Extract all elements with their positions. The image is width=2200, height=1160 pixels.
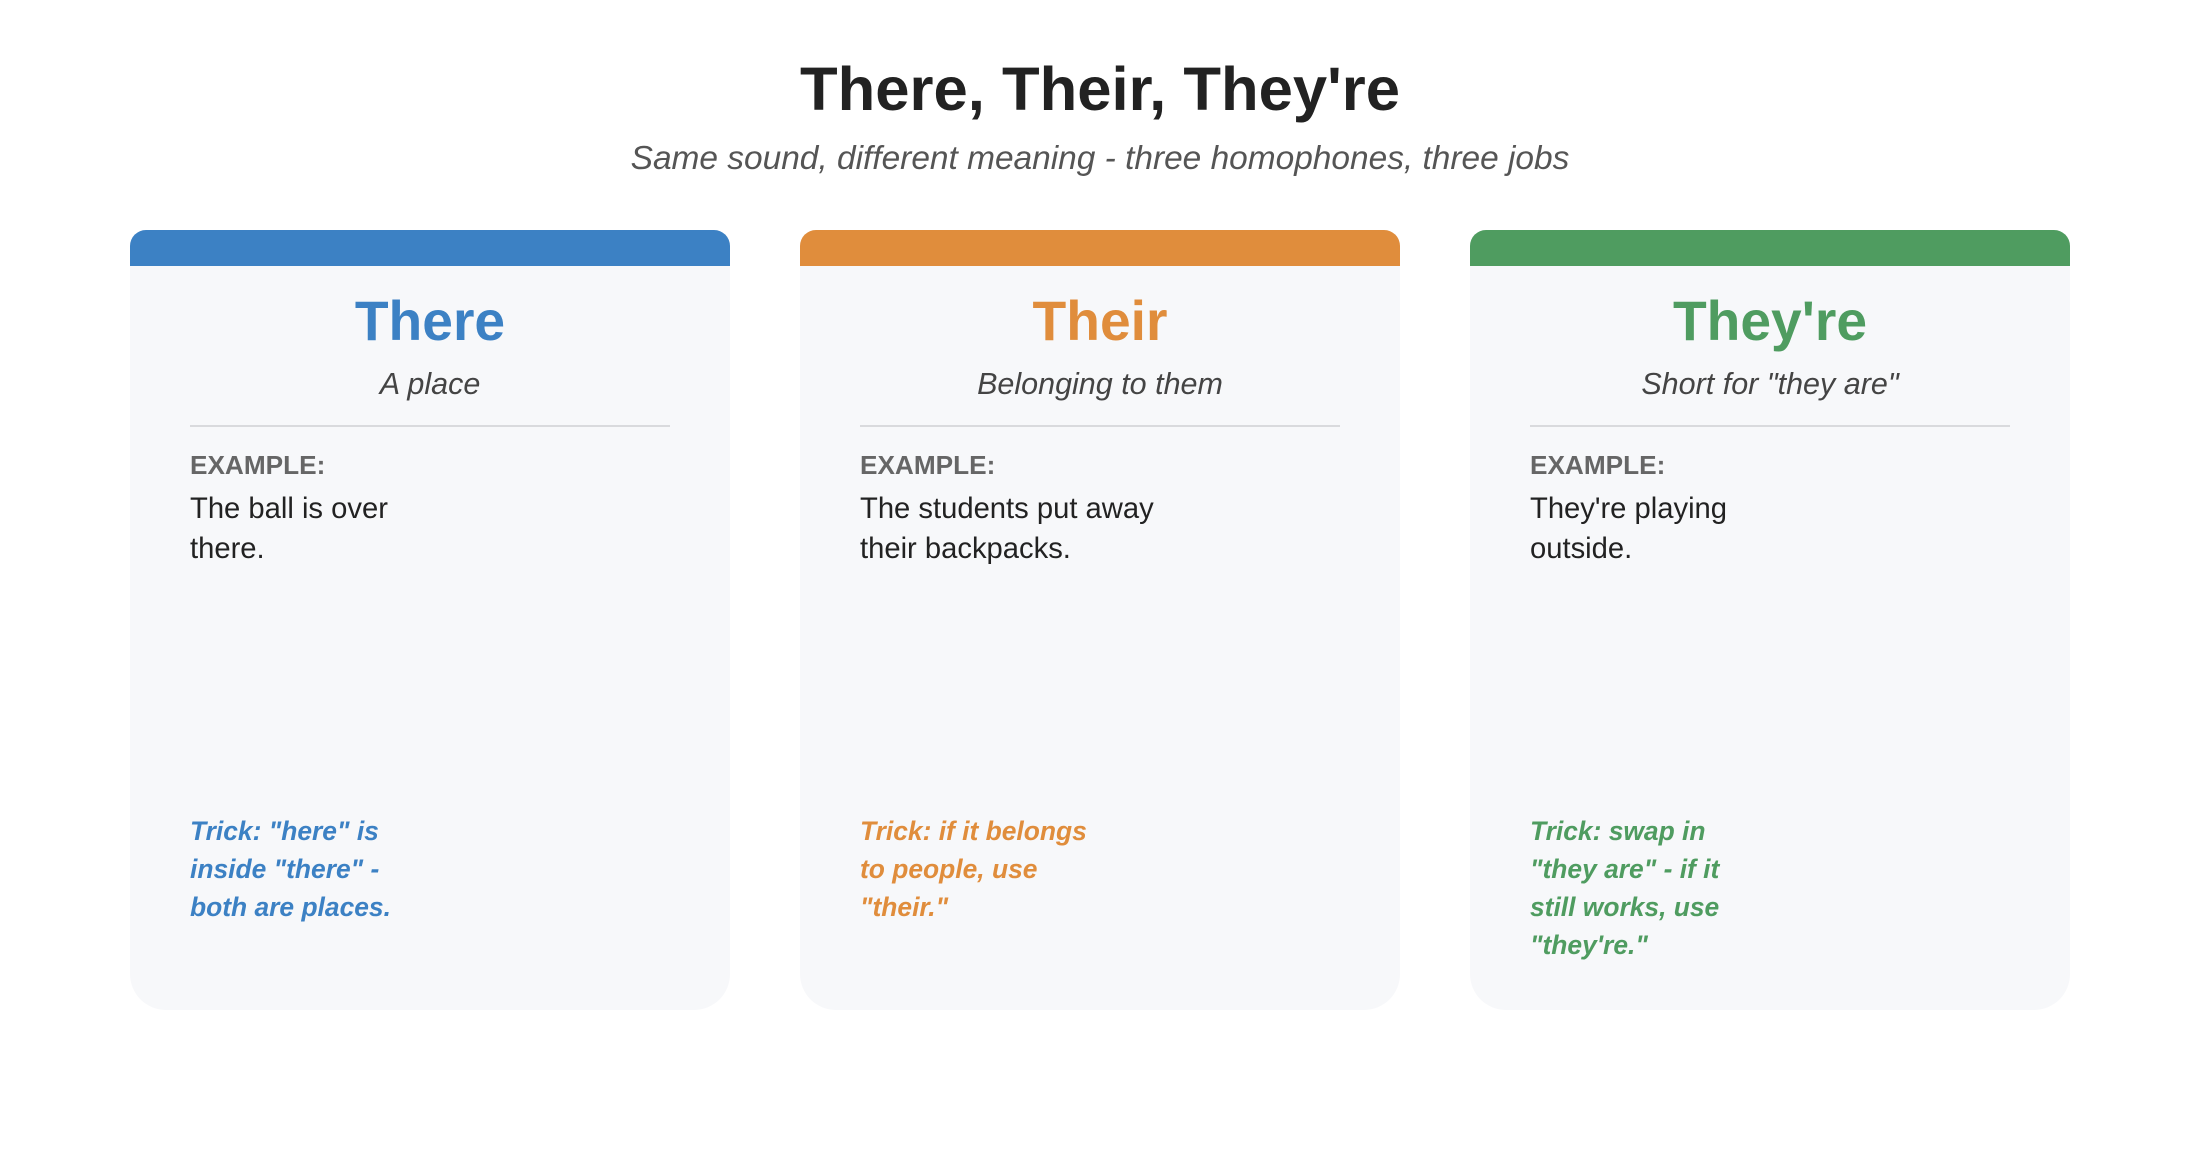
example text: They're: outside. <box>1530 533 1632 565</box>
example label: They're: EXAMPLE: <box>1530 450 1665 480</box>
example text: There: there. <box>190 533 265 565</box>
trick: They're: Trick: swap in <box>1530 816 1706 846</box>
card header bar: They're <box>1470 230 2070 266</box>
word heading: Their: Their <box>1033 290 1167 352</box>
trick: Their: to people, use <box>860 854 1037 884</box>
title: There, Their, They're <box>800 55 1400 124</box>
definition: There: A place <box>378 367 480 401</box>
word heading: They're: They're <box>1673 290 1867 352</box>
trick: They're: "they are" - if it <box>1530 854 1720 884</box>
trick: Their: "their." <box>860 892 949 922</box>
example text: Their: their backpacks. <box>860 533 1071 565</box>
definition: Their: Belonging to them <box>977 367 1223 401</box>
example text: There: The ball is over <box>190 493 388 525</box>
trick: There: both are places. <box>190 892 391 922</box>
definition: They're: Short for "they are" <box>1641 367 1900 401</box>
panel: They're <box>1470 230 2070 1010</box>
trick: There: inside "there" - <box>190 854 379 884</box>
example label: There: EXAMPLE: <box>190 450 325 480</box>
subtitle: Same sound, different meaning - three homophones, three jobs <box>631 140 1570 177</box>
panel: Their <box>800 230 1400 1010</box>
trick: Their: Trick: if it belongs <box>860 816 1087 846</box>
trick: There: Trick: "here" is <box>190 816 379 846</box>
example text: They're: They're playing <box>1530 493 1727 525</box>
trick: They're: still works, use <box>1530 892 1719 922</box>
panel: There <box>130 230 730 1010</box>
example label: Their: EXAMPLE: <box>860 450 995 480</box>
card header bar: Their <box>800 230 1400 266</box>
word heading: There: There <box>355 290 505 352</box>
example text: Their: The students put away <box>860 493 1154 525</box>
trick: They're: "they're." <box>1530 930 1648 960</box>
card header bar: There <box>130 230 730 266</box>
